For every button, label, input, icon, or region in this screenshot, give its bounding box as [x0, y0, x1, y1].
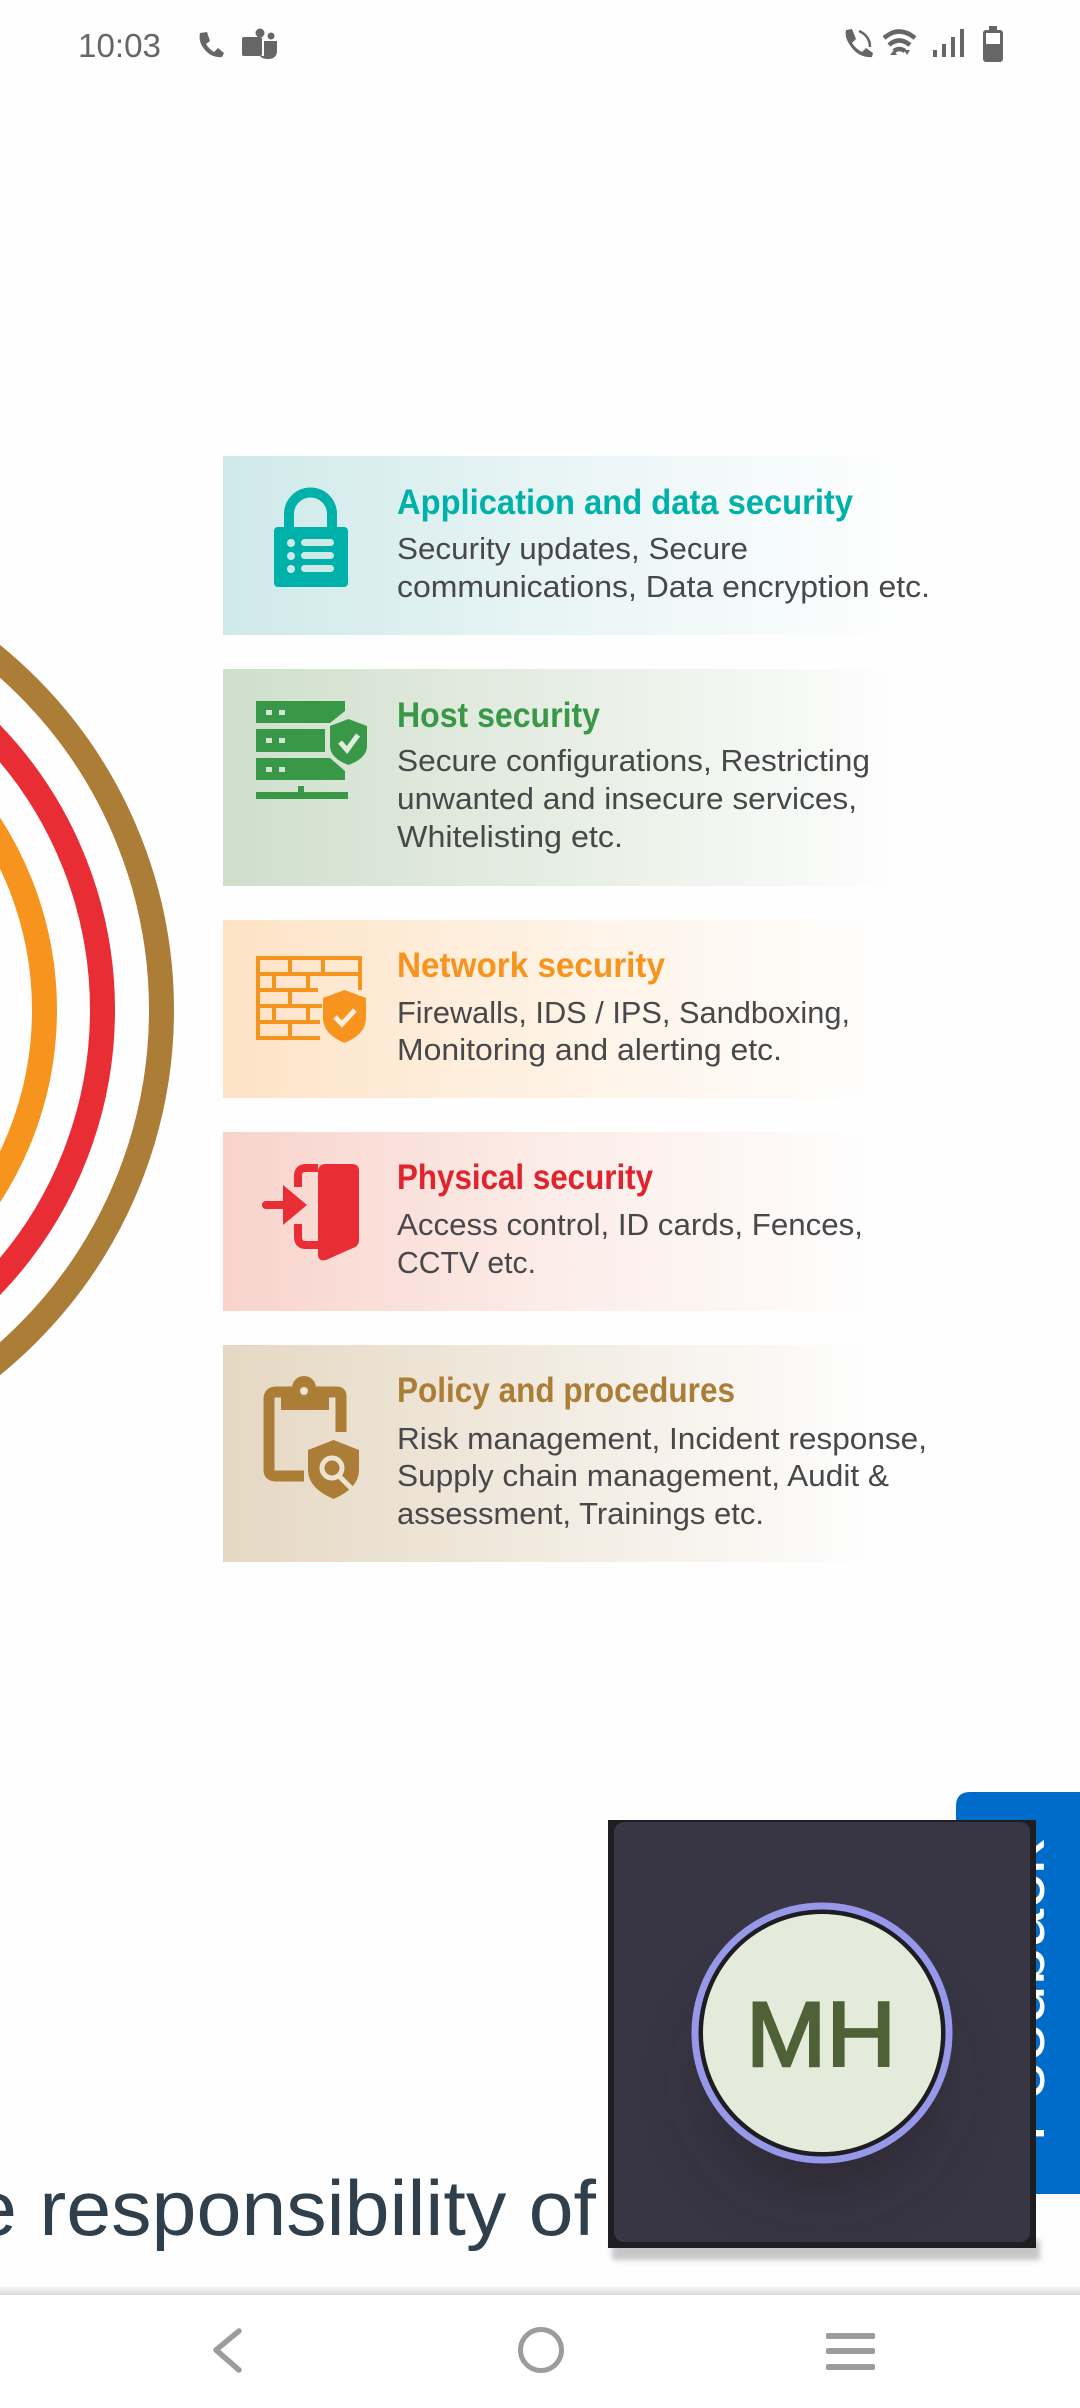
navigation bar [0, 2287, 1080, 2408]
icon: server with shield [256, 701, 367, 799]
text block: CCTV etc. [397, 1245, 536, 1280]
text block: Risk management, Incident response, [397, 1421, 927, 1456]
text block: Access control, ID cards, Fences, [397, 1207, 863, 1242]
icon: teams [242, 28, 277, 59]
panel: policy and procedures [223, 1345, 927, 1562]
avatar [695, 1906, 949, 2160]
status bar [0, 0, 1080, 90]
icon: wifi call [846, 29, 873, 57]
icon: lock [274, 492, 348, 587]
heading: Host security [397, 696, 600, 735]
text block [397, 1421, 927, 1531]
panel: application and data security [223, 456, 930, 635]
heading: Network security [397, 946, 665, 985]
heading: Application and data security [397, 483, 853, 522]
text block: Whitelisting etc. [397, 819, 623, 854]
text block: communications, Data encryption etc. [397, 569, 930, 604]
heading: Policy and procedures [397, 1371, 735, 1410]
icon: clipboard with shield [269, 1376, 359, 1499]
icon: menu [826, 2333, 875, 2370]
icon: wifi [884, 32, 915, 55]
text block: assessment, Trainings etc. [397, 1496, 764, 1531]
text block: Supply chain management, Audit & [397, 1458, 889, 1493]
feedback tab: Feedback [984, 1839, 1058, 2142]
feedback tab [956, 1792, 1080, 2194]
icon: back [216, 2331, 239, 2370]
icon: firewall with shield [258, 958, 366, 1043]
video tile: MH [608, 1820, 1040, 2260]
text block [397, 743, 870, 854]
heading: Physical security [397, 1158, 653, 1197]
panel: physical security [223, 1132, 873, 1311]
text block: Security updates, Secure [397, 531, 748, 566]
panel: host security [223, 669, 903, 886]
text block: Monitoring and alerting etc. [397, 1032, 782, 1067]
text block: Firewalls, IDS / IPS, Sandboxing, [397, 995, 850, 1030]
icon: phone [200, 32, 224, 57]
icon: home [520, 2330, 562, 2370]
clock: 10:03 [78, 27, 161, 64]
avatar: MH [746, 1984, 896, 2086]
text block [397, 995, 850, 1067]
icon: signal [933, 29, 964, 57]
concentric rings [0, 552, 162, 1468]
panel: network security [223, 920, 883, 1098]
text block: Secure configurations, Restricting [397, 743, 870, 778]
text block [397, 531, 930, 604]
icon: battery [983, 26, 1003, 62]
icon: door with arrow [266, 1164, 359, 1260]
text block: unwanted and insecure services, [397, 781, 857, 816]
text block [397, 1207, 863, 1280]
